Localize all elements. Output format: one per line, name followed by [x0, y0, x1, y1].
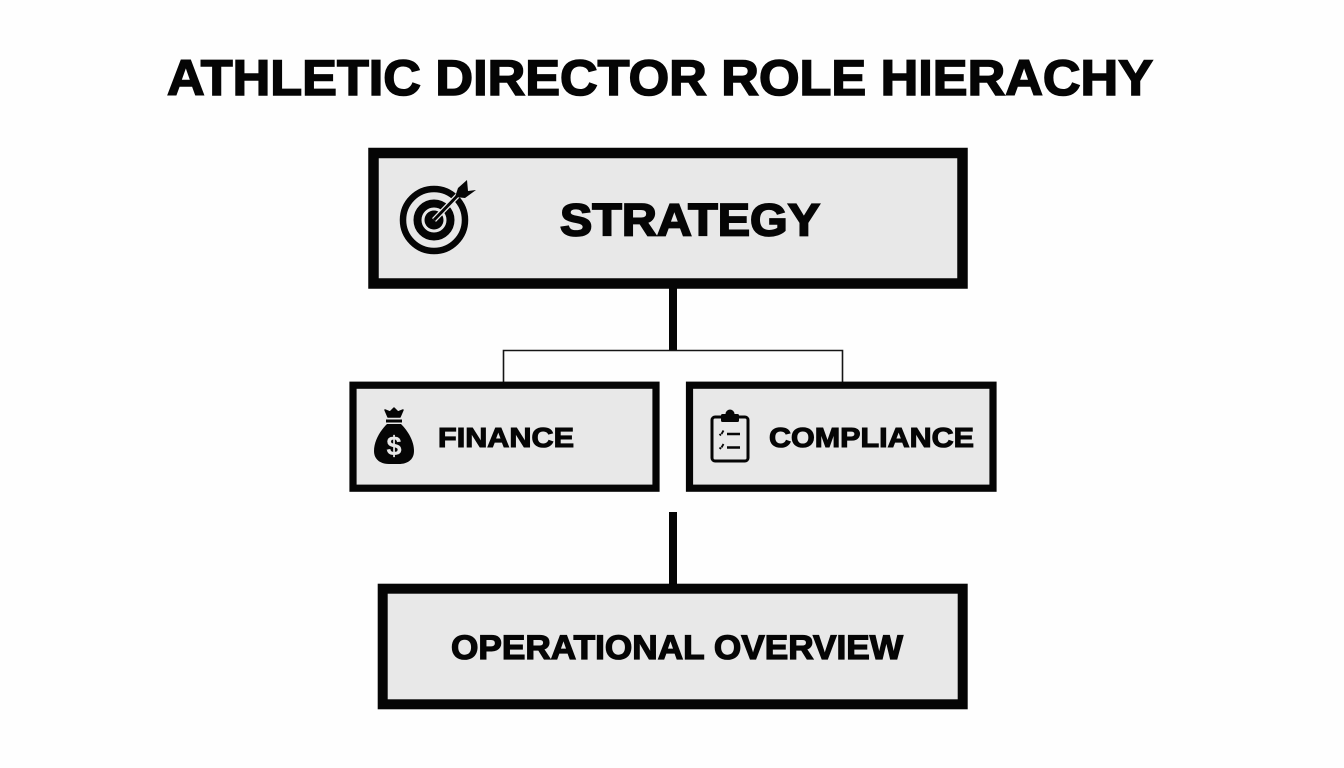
label: operational overview: OPERATIONAL OVERVIEW: [451, 629, 904, 667]
panel: strategy: [374, 153, 962, 284]
arrow: branch connector to finance and compliance: [504, 350, 842, 382]
icon: money bag: [374, 408, 414, 464]
arrow: connector to operational overview: [669, 512, 677, 585]
panel: compliance: [690, 385, 993, 488]
icon: money bag: $: [386, 431, 402, 461]
panel: operational overview: [383, 589, 963, 704]
heading: strategy: STRATEGY: [560, 194, 820, 246]
panel: finance: [353, 385, 656, 488]
icon: target with arrow: [403, 180, 476, 251]
icon: clipboard checklist: [712, 410, 748, 461]
label: compliance: COMPLIANCE: [769, 422, 974, 453]
title: ATHLETIC DIRECTOR ROLE HIERACHY: [167, 49, 1153, 106]
label: finance: FINANCE: [438, 422, 574, 453]
arrow: strategy to branch connector: [669, 288, 677, 351]
